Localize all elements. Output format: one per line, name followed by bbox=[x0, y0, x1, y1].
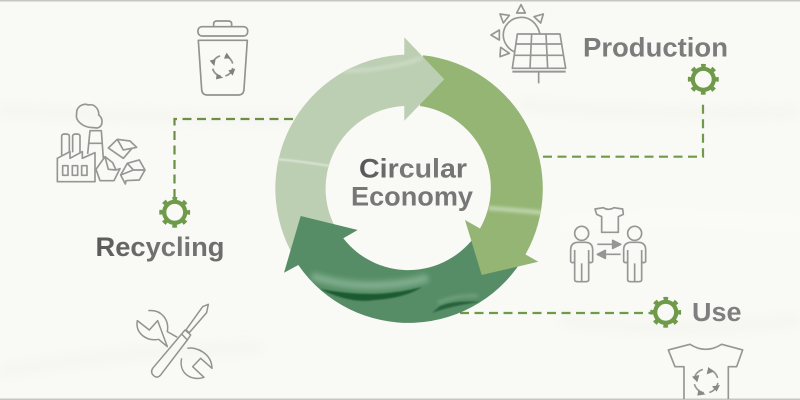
circular arrows ring bbox=[275, 37, 545, 323]
paper wrinkles on ring bbox=[275, 58, 545, 313]
dashed connector: production bbox=[543, 101, 703, 157]
dashed connector: use bbox=[460, 312, 652, 314]
label: Production: Production bbox=[583, 33, 728, 63]
center title: Economy bbox=[351, 182, 473, 212]
icon: t-shirt with recycling symbol bbox=[668, 344, 743, 399]
label: Recycling: Recycling bbox=[96, 232, 224, 262]
light green arrow: recycling bbox=[275, 37, 444, 260]
icon: wrench and screwdriver bbox=[137, 304, 212, 378]
gear: recycling bbox=[161, 199, 188, 226]
icon: solar panel and sun bbox=[491, 5, 566, 83]
icon: two people exchanging a shirt bbox=[571, 208, 646, 282]
medium green arrow head bbox=[465, 220, 538, 275]
icon: trash bin bbox=[198, 21, 248, 95]
icon: factory with recycling symbol bbox=[57, 104, 145, 184]
medium green arrow body: production bbox=[420, 55, 543, 254]
gear: production bbox=[690, 66, 717, 93]
label: Use: Use bbox=[692, 299, 742, 327]
dashed connector: recycling bbox=[174, 119, 293, 201]
center title: Circular bbox=[359, 154, 468, 184]
center title bbox=[351, 154, 473, 212]
dark green arrow: use bbox=[284, 216, 526, 323]
gear: use bbox=[652, 299, 679, 326]
